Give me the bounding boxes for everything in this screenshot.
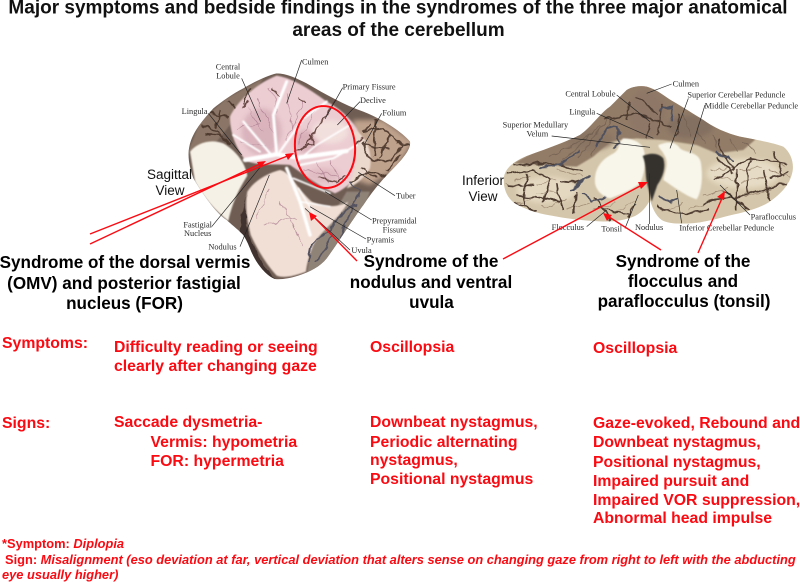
title: areas of the cerebellum — [292, 20, 505, 41]
bright lateral folia — [707, 158, 780, 188]
signs: nodulus: Downbeat nystagmus, — [370, 414, 538, 431]
anatomical labels — [503, 80, 798, 234]
anatomical labels: Pyramis — [367, 235, 394, 244]
grey vessels — [308, 182, 360, 262]
symptoms: flocculus: Oscillopsia — [593, 340, 677, 357]
central upper shading — [628, 90, 665, 137]
syndrome heading: dorsal vermis: nucleus (FOR) — [66, 294, 183, 313]
brown folia network — [200, 88, 410, 182]
anatomical labels: Tonsil — [601, 225, 623, 234]
syndrome heading: nodulus and uvula: nodulus and ventral — [350, 273, 512, 292]
signs: flocculus: Gaze-evoked, Rebound and — [593, 415, 800, 432]
inferior cerebellum specimen — [497, 80, 800, 234]
anatomical labels: Paraflocculus — [751, 212, 796, 221]
syndrome heading: nodulus and uvula: uvula — [409, 293, 454, 312]
red ellipse around dorsal vermis — [292, 104, 358, 190]
syndrome heading: flocculus and paraflocculus: Syndrome of the — [616, 252, 750, 271]
arrow to vermis — [90, 153, 294, 234]
arrow to tonsil — [603, 213, 661, 250]
footnote: *Symptom: Diplopia — [2, 536, 124, 551]
top brown slopes — [513, 83, 757, 167]
syndrome heading: dorsal vermis — [0, 253, 250, 313]
dark brown folia network — [507, 97, 790, 220]
anatomical labels: Inferior Cerebellar Peduncle — [679, 224, 774, 233]
signs: flocculus: Impaired pursuit and — [593, 473, 749, 490]
anatomical labels: Prepyramidal — [372, 217, 418, 226]
anatomical labels: Middle Cerebellar Peduncle — [705, 102, 798, 111]
red arrows — [90, 153, 725, 261]
anatomical labels: Fastigial — [183, 220, 213, 229]
syndrome heading: flocculus and paraflocculus — [598, 252, 770, 311]
signs: flocculus: Abnormal head impulse — [593, 510, 772, 527]
anatomical labels: Nucleus — [184, 229, 211, 238]
anatomical labels: Tuber — [396, 191, 416, 200]
white cut surface left — [595, 138, 645, 198]
syndrome heading: nodulus and uvula — [350, 252, 512, 312]
symptoms: dorsal vermis: clearly after changing gaze — [114, 358, 317, 375]
leader lines — [208, 60, 395, 250]
label: inferior view: View — [468, 189, 498, 204]
fine folia lines — [513, 160, 790, 210]
arrow to uvula — [309, 212, 357, 261]
upper pink lobules — [230, 76, 366, 193]
label: sagittal view — [147, 167, 192, 198]
anatomical labels: Central — [216, 63, 241, 72]
pale lobe rim — [347, 128, 371, 188]
leader lines — [552, 84, 750, 228]
symptoms: dorsal vermis: Difficulty reading or seeing — [114, 339, 318, 356]
dark fissures — [243, 88, 362, 183]
row label: signs: Signs: — [2, 415, 50, 432]
signs: nodulus — [370, 414, 538, 488]
white cut surface right — [658, 142, 702, 199]
footnote: eye usually higher) — [2, 567, 118, 582]
symptoms: dorsal vermis — [114, 339, 318, 375]
anatomical labels: Lingula — [182, 107, 208, 116]
signs: flocculus — [593, 415, 800, 527]
white matter branches — [233, 82, 357, 235]
anatomical labels: Nodulus — [635, 223, 663, 232]
footnote: Sign: Misalignment (eso deviation at far, vertical deviation that alters sense on changing gaze from right to left with the abducting — [5, 552, 796, 567]
arrow to paraflocculus — [698, 191, 725, 253]
anatomical labels — [182, 57, 418, 255]
anatomical labels: Velum — [526, 130, 549, 139]
upper left brown rim — [188, 78, 263, 152]
specimen tissue — [504, 86, 793, 224]
signs: dorsal vermis: FOR: hypermetria — [150, 453, 284, 470]
lower lobe — [246, 170, 348, 277]
arrow to fastigial nucleus — [90, 161, 266, 244]
dark fourth ventricle — [643, 154, 664, 202]
signs: nodulus: Periodic alternating — [370, 434, 517, 451]
syndrome heading: flocculus and paraflocculus: flocculus and — [628, 272, 738, 291]
signs: flocculus: Impaired VOR suppression, — [593, 492, 800, 509]
sagittal cerebellum specimen — [180, 57, 420, 285]
specimen tissue — [188, 73, 410, 280]
label: sagittal view: View — [155, 183, 185, 198]
signs: flocculus: Downbeat nystagmus, — [593, 434, 761, 451]
footnote — [2, 536, 796, 582]
anatomical labels: Culmen — [302, 57, 329, 66]
anatomical labels: Declive — [360, 96, 386, 105]
dark left margin — [240, 195, 276, 279]
mauve shading — [242, 108, 282, 155]
syndrome heading: nodulus and uvula: Syndrome of the — [364, 252, 498, 271]
anatomical labels: Nodulus — [208, 242, 237, 251]
anatomical labels: Uvula — [351, 246, 372, 255]
anatomical labels: Central Lobule — [565, 90, 616, 99]
row label: symptoms: Symptoms: — [2, 335, 88, 352]
label: inferior view: Inferior — [462, 173, 505, 188]
folia lines — [237, 88, 343, 245]
lower right tissue — [307, 192, 370, 275]
anatomical labels: Superior Medullary — [503, 121, 569, 130]
anatomical labels: Fissure — [383, 225, 407, 234]
anatomical labels: Folium — [382, 109, 407, 118]
signs: nodulus: Positional nystagmus — [370, 471, 533, 488]
signs: dorsal vermis — [114, 414, 297, 470]
label: sagittal view: Sagittal — [147, 167, 192, 182]
symptoms: nodulus: Oscillopsia — [370, 339, 454, 356]
signs: dorsal vermis: Vermis: hypometria — [150, 434, 297, 451]
anatomical labels: Lobule — [216, 71, 240, 80]
label: inferior view — [462, 173, 505, 204]
syndrome heading: dorsal vermis: (OMV) and posterior fastigial — [7, 274, 241, 293]
stripes on slopes — [550, 113, 757, 160]
signs: dorsal vermis: Saccade dysmetria- — [114, 414, 262, 431]
anatomical labels: Superior Cerebellar Peduncle — [687, 90, 786, 99]
anatomical labels: Primary Fissure — [343, 83, 396, 92]
signs: flocculus: Positional nystagmus, — [593, 454, 761, 471]
anatomical labels: Flocculus — [552, 223, 584, 232]
right tan folia — [350, 120, 413, 185]
syndrome heading: flocculus and paraflocculus: paraflocculus (tonsil) — [598, 292, 770, 311]
signs: nodulus: nystagmus, — [370, 452, 458, 469]
syndrome heading: dorsal vermis: Syndrome of the dorsal vermis — [0, 253, 250, 272]
anatomical labels: Culmen — [673, 80, 700, 89]
arrow to nodulus — [503, 182, 648, 259]
anatomical labels: Lingula — [569, 107, 596, 116]
white left lobe — [190, 141, 247, 221]
title — [8, 0, 788, 41]
grey vessels — [540, 107, 733, 202]
